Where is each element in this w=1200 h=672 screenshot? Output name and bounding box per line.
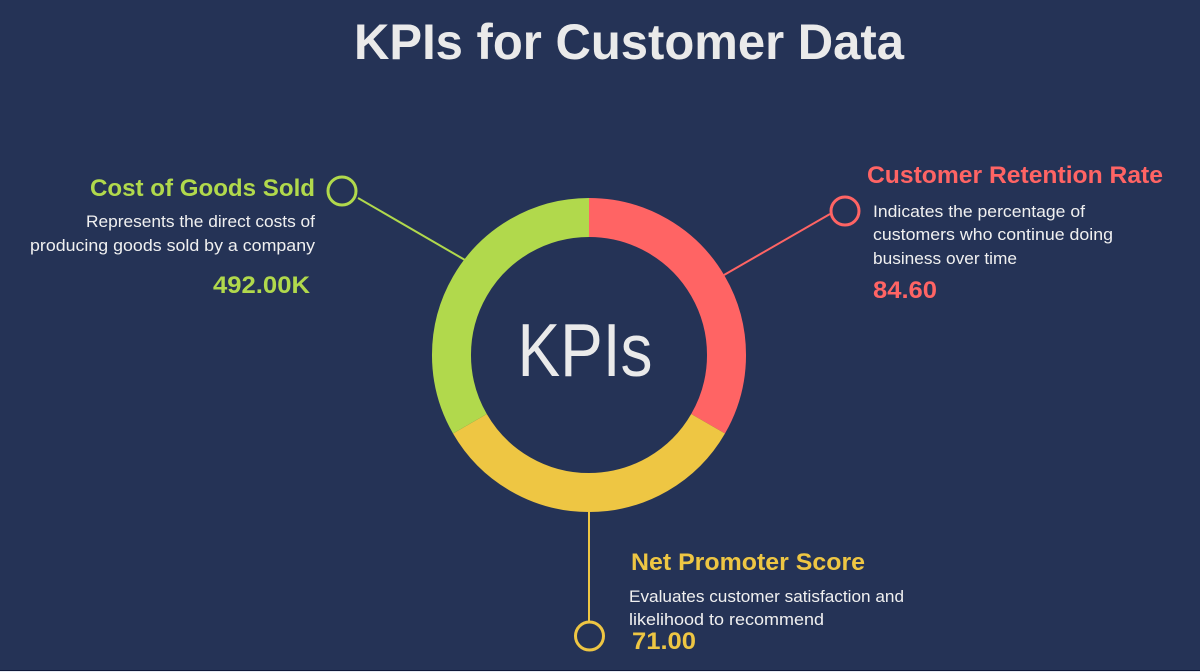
segment: cost of goods sold [451,218,589,424]
description: producing goods sold by a company [30,237,316,255]
callout: cost of goods sold [30,175,465,299]
donut chart [451,218,727,493]
donut center label: KPIs [518,308,652,392]
description [873,203,1113,268]
connector line [724,214,830,275]
value: 492.00K [213,272,311,299]
heading: Customer Retention Rate [867,162,1163,189]
callout: net promoter score [576,512,904,655]
description [30,213,316,255]
description: likelihood to recommend [629,611,824,629]
description: customers who continue doing [873,226,1113,244]
description: business over time [873,250,1017,268]
heading: Net Promoter Score [631,549,865,576]
description [629,588,904,629]
heading: Cost of Goods Sold [90,175,315,202]
value: 84.60 [873,277,937,304]
callout: customer retention rate [724,162,1163,304]
connector line [358,198,465,260]
description: Evaluates customer satisfaction and [629,588,904,606]
marker circle [576,622,604,650]
title: KPIs for Customer Data [354,14,905,70]
description: Indicates the percentage of [873,203,1085,221]
segment: customer retention rate [589,218,727,424]
description: Represents the direct costs of [86,213,315,231]
value: 71.00 [632,628,696,655]
marker circle [328,177,356,205]
connector line [588,512,590,621]
marker circle [831,197,859,225]
segment: net promoter score [470,424,708,493]
